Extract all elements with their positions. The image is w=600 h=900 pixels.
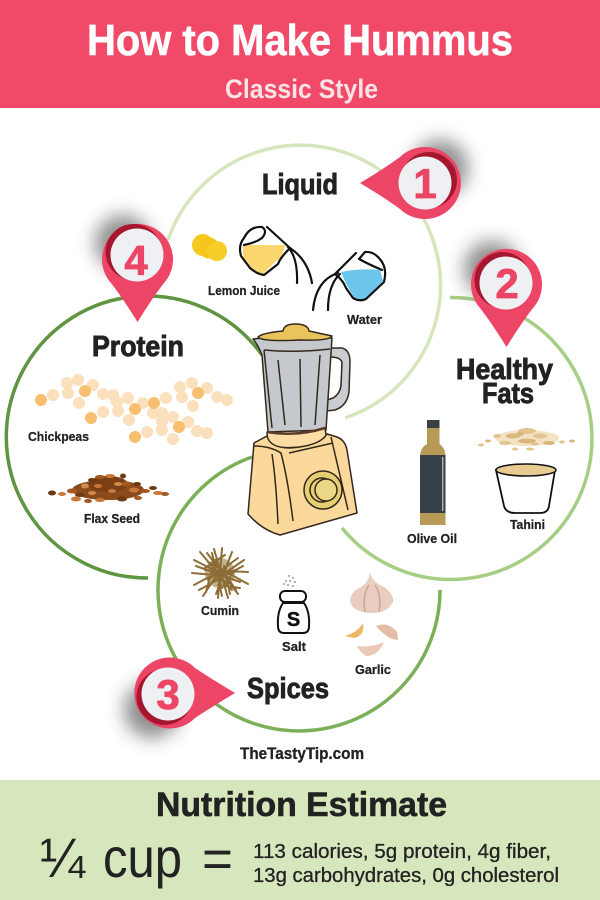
icon: lemon slices [192,234,227,261]
circle: healthy fats [342,297,592,579]
website credit: TheTastyTip.com [240,744,364,763]
blender dial [304,471,342,509]
garlic cloves [345,623,363,638]
icon: blender [248,324,357,535]
salt shaker letter: S [287,609,300,631]
label: salt: Salt [282,639,307,654]
pin 1 [360,140,468,219]
heading: liquid: Liquid [262,169,338,201]
icon: garlic [345,572,398,656]
serving size: cup [103,826,182,889]
blender base [248,434,357,535]
number 3: 3 [156,671,180,718]
heading: healthy fats: Healthy [456,354,553,386]
heading: protein: Protein [92,331,184,363]
blender lid [258,324,332,341]
icon: sesame seeds [478,428,575,450]
icon: tahini bowl [496,464,556,513]
heading: spices: Spices [247,673,329,705]
label: tahini: Tahini [510,517,545,532]
icon: chickpeas [35,374,233,445]
heading: healthy fats: Fats [482,378,534,410]
nutrition panel [0,780,600,900]
icon: water jug [313,252,385,310]
label: olive oil: Olive Oil [407,531,457,546]
label: flax seed: Flax Seed [84,511,140,526]
number 2: 2 [495,260,519,307]
label: garlic: Garlic [355,662,391,677]
heading: healthy fats [456,354,553,410]
subtitle: Classic Style [225,74,378,104]
icon: salt shaker [278,575,309,633]
pin 4 [95,215,173,322]
blender jar [253,338,332,432]
label: water: Water [347,312,382,327]
circle: spices [158,457,440,731]
number 1: 1 [413,160,437,207]
label: chickpeas: Chickpeas [28,429,89,444]
equals sign: = [202,829,233,889]
header banner [0,0,600,108]
nutrition facts [253,841,559,887]
circle: liquid [168,145,440,418]
pin 3 [124,657,235,738]
blender handle [326,348,350,411]
nutrition heading: Nutrition Estimate [156,786,447,824]
nutrition facts: 13g carbohydrates, 0g cholesterol [253,865,559,887]
label: cumin: Cumin [201,603,239,618]
pin 2 [464,241,542,347]
fraction one quarter: ¼ [40,826,86,889]
blender collar [267,428,327,448]
nutrition facts: 113 calories, 5g protein, 4g fiber, [253,841,551,863]
icon: cumin [192,548,248,598]
label: lemon juice: Lemon Juice [208,283,280,298]
circle: protein [6,296,262,578]
icon: flax seed [48,474,169,503]
number 4: 4 [124,237,148,284]
icon: lemon juice jug [240,227,312,283]
icon: olive oil bottle [420,420,446,525]
title: How to Make Hummus [87,16,513,65]
